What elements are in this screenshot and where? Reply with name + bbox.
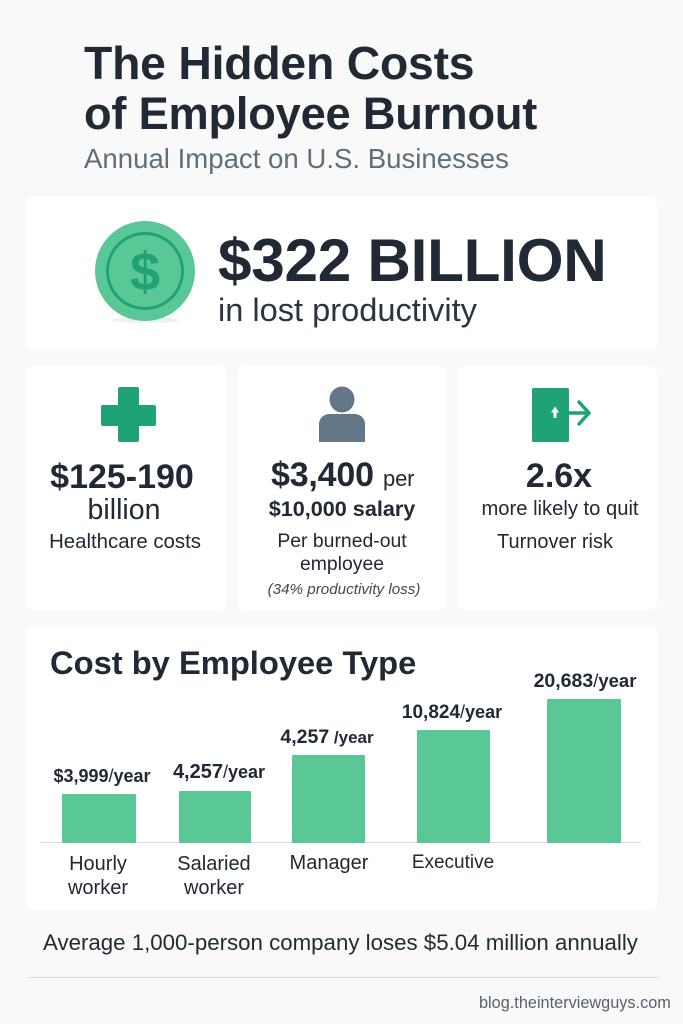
healthcare value: $125-190 bbox=[50, 458, 194, 496]
bar: executive bbox=[402, 702, 502, 873]
bar: executive: 10,824/year bbox=[402, 702, 502, 723]
bar: hourly worker: $3,999/year bbox=[53, 766, 151, 786]
bar: hourly worker: worker bbox=[68, 877, 128, 899]
panel: cost by employee type bbox=[26, 625, 657, 910]
subtitle: Annual Impact on U.S. Businesses bbox=[84, 143, 509, 174]
turnover sublabel: Turnover risk bbox=[497, 531, 613, 553]
turnover label: more likely to quit bbox=[481, 498, 639, 520]
per employee label: employee bbox=[300, 553, 384, 575]
healthcare label: Healthcare costs bbox=[49, 531, 201, 553]
per employee label bbox=[277, 530, 407, 575]
bar: manager bbox=[280, 726, 374, 874]
bar: manager: Manager bbox=[290, 852, 368, 874]
icon: exit door bbox=[532, 388, 591, 442]
bar chart bbox=[41, 670, 641, 899]
bar: unlabelled top tier: 20,683/year bbox=[534, 670, 636, 692]
bar: salaried worker: worker bbox=[184, 877, 244, 899]
big number caption: in lost productivity bbox=[218, 291, 477, 328]
icon: dollar coin: $ bbox=[130, 242, 160, 302]
title: The Hidden Costs bbox=[84, 37, 474, 89]
per employee value: $3,400 per bbox=[271, 456, 414, 494]
bar: manager: 4,257 /year bbox=[280, 726, 374, 748]
healthcare unit: billion bbox=[88, 494, 160, 526]
panel: headline bbox=[26, 196, 657, 351]
per employee note: (34% productivity loss) bbox=[268, 581, 420, 598]
title: of Employee Burnout bbox=[84, 88, 537, 139]
bar: salaried worker: Salaried bbox=[177, 853, 251, 875]
chart heading: Cost by Employee Type bbox=[50, 644, 416, 681]
panel: turnover bbox=[458, 365, 657, 611]
icon: dollar coin bbox=[95, 221, 195, 323]
bar: salaried worker: 4,257/year bbox=[173, 761, 265, 783]
icon: medical cross bbox=[101, 387, 156, 442]
source credit: blog.theinterviewguys.com bbox=[479, 994, 671, 1012]
bar: unlabelled top tier bbox=[534, 670, 636, 843]
bar: executive: Executive bbox=[412, 852, 494, 873]
panel: per employee bbox=[238, 365, 446, 611]
per employee label: Per burned-out bbox=[277, 530, 407, 552]
bar: hourly worker bbox=[53, 766, 151, 899]
icon: person bbox=[319, 386, 365, 442]
bar: hourly worker: Hourly bbox=[69, 853, 127, 875]
title bbox=[84, 37, 537, 139]
per employee salary: $10,000 salary bbox=[269, 496, 415, 521]
turnover value: 2.6x bbox=[526, 457, 592, 495]
bar: salaried worker bbox=[173, 761, 265, 899]
summary line: Average 1,000-person company loses $5.04 million annually bbox=[43, 930, 638, 955]
panel: healthcare bbox=[26, 365, 226, 611]
big number: $322 BILLION bbox=[218, 226, 606, 294]
